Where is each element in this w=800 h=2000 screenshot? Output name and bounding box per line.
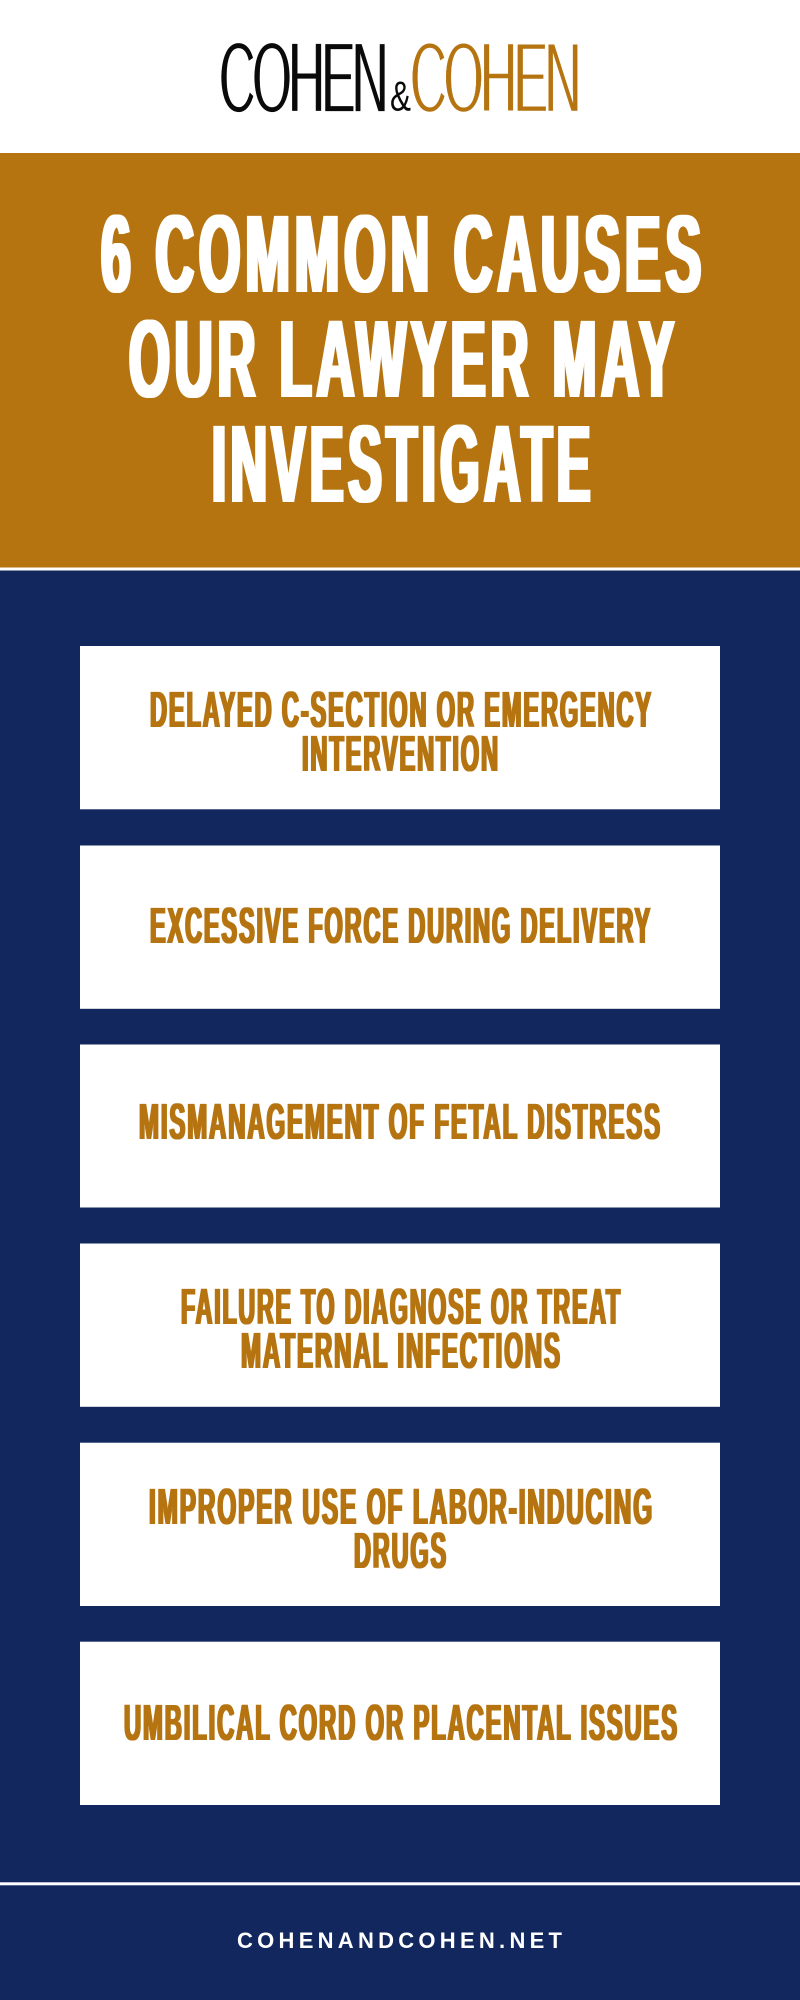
- card 4: maternal infections: [80, 1244, 720, 1407]
- logo: Cohen & Cohen: [219, 22, 578, 134]
- card 1 text: [150, 681, 653, 782]
- logo word: black COHEN: COHEN: [219, 22, 385, 134]
- logo word: gold COHEN: COHEN: [410, 22, 578, 134]
- card 1 text: INTERVENTION: [302, 725, 500, 782]
- panel: gold title band: [0, 153, 800, 568]
- logo ampersand: &: [390, 73, 411, 120]
- card 6: umbilical cord: [80, 1642, 720, 1805]
- card 5: labor-inducing drugs: [80, 1443, 720, 1606]
- card 4 text: [181, 1278, 622, 1379]
- panel: navy body background: [0, 570, 800, 2000]
- card 5 text: DRUGS: [354, 1522, 448, 1579]
- card 5 text: [149, 1478, 654, 1579]
- title: [101, 193, 706, 526]
- white divider under title: [0, 568, 800, 570]
- card 1: delayed c-section: [80, 646, 720, 809]
- white divider above footer: [0, 1882, 800, 1885]
- card 2: excessive force: [80, 846, 720, 1009]
- panel: white header background: [0, 0, 800, 153]
- footer website: COHENANDCOHEN.NET: [237, 1928, 563, 1953]
- card 3: fetal distress: [80, 1044, 720, 1208]
